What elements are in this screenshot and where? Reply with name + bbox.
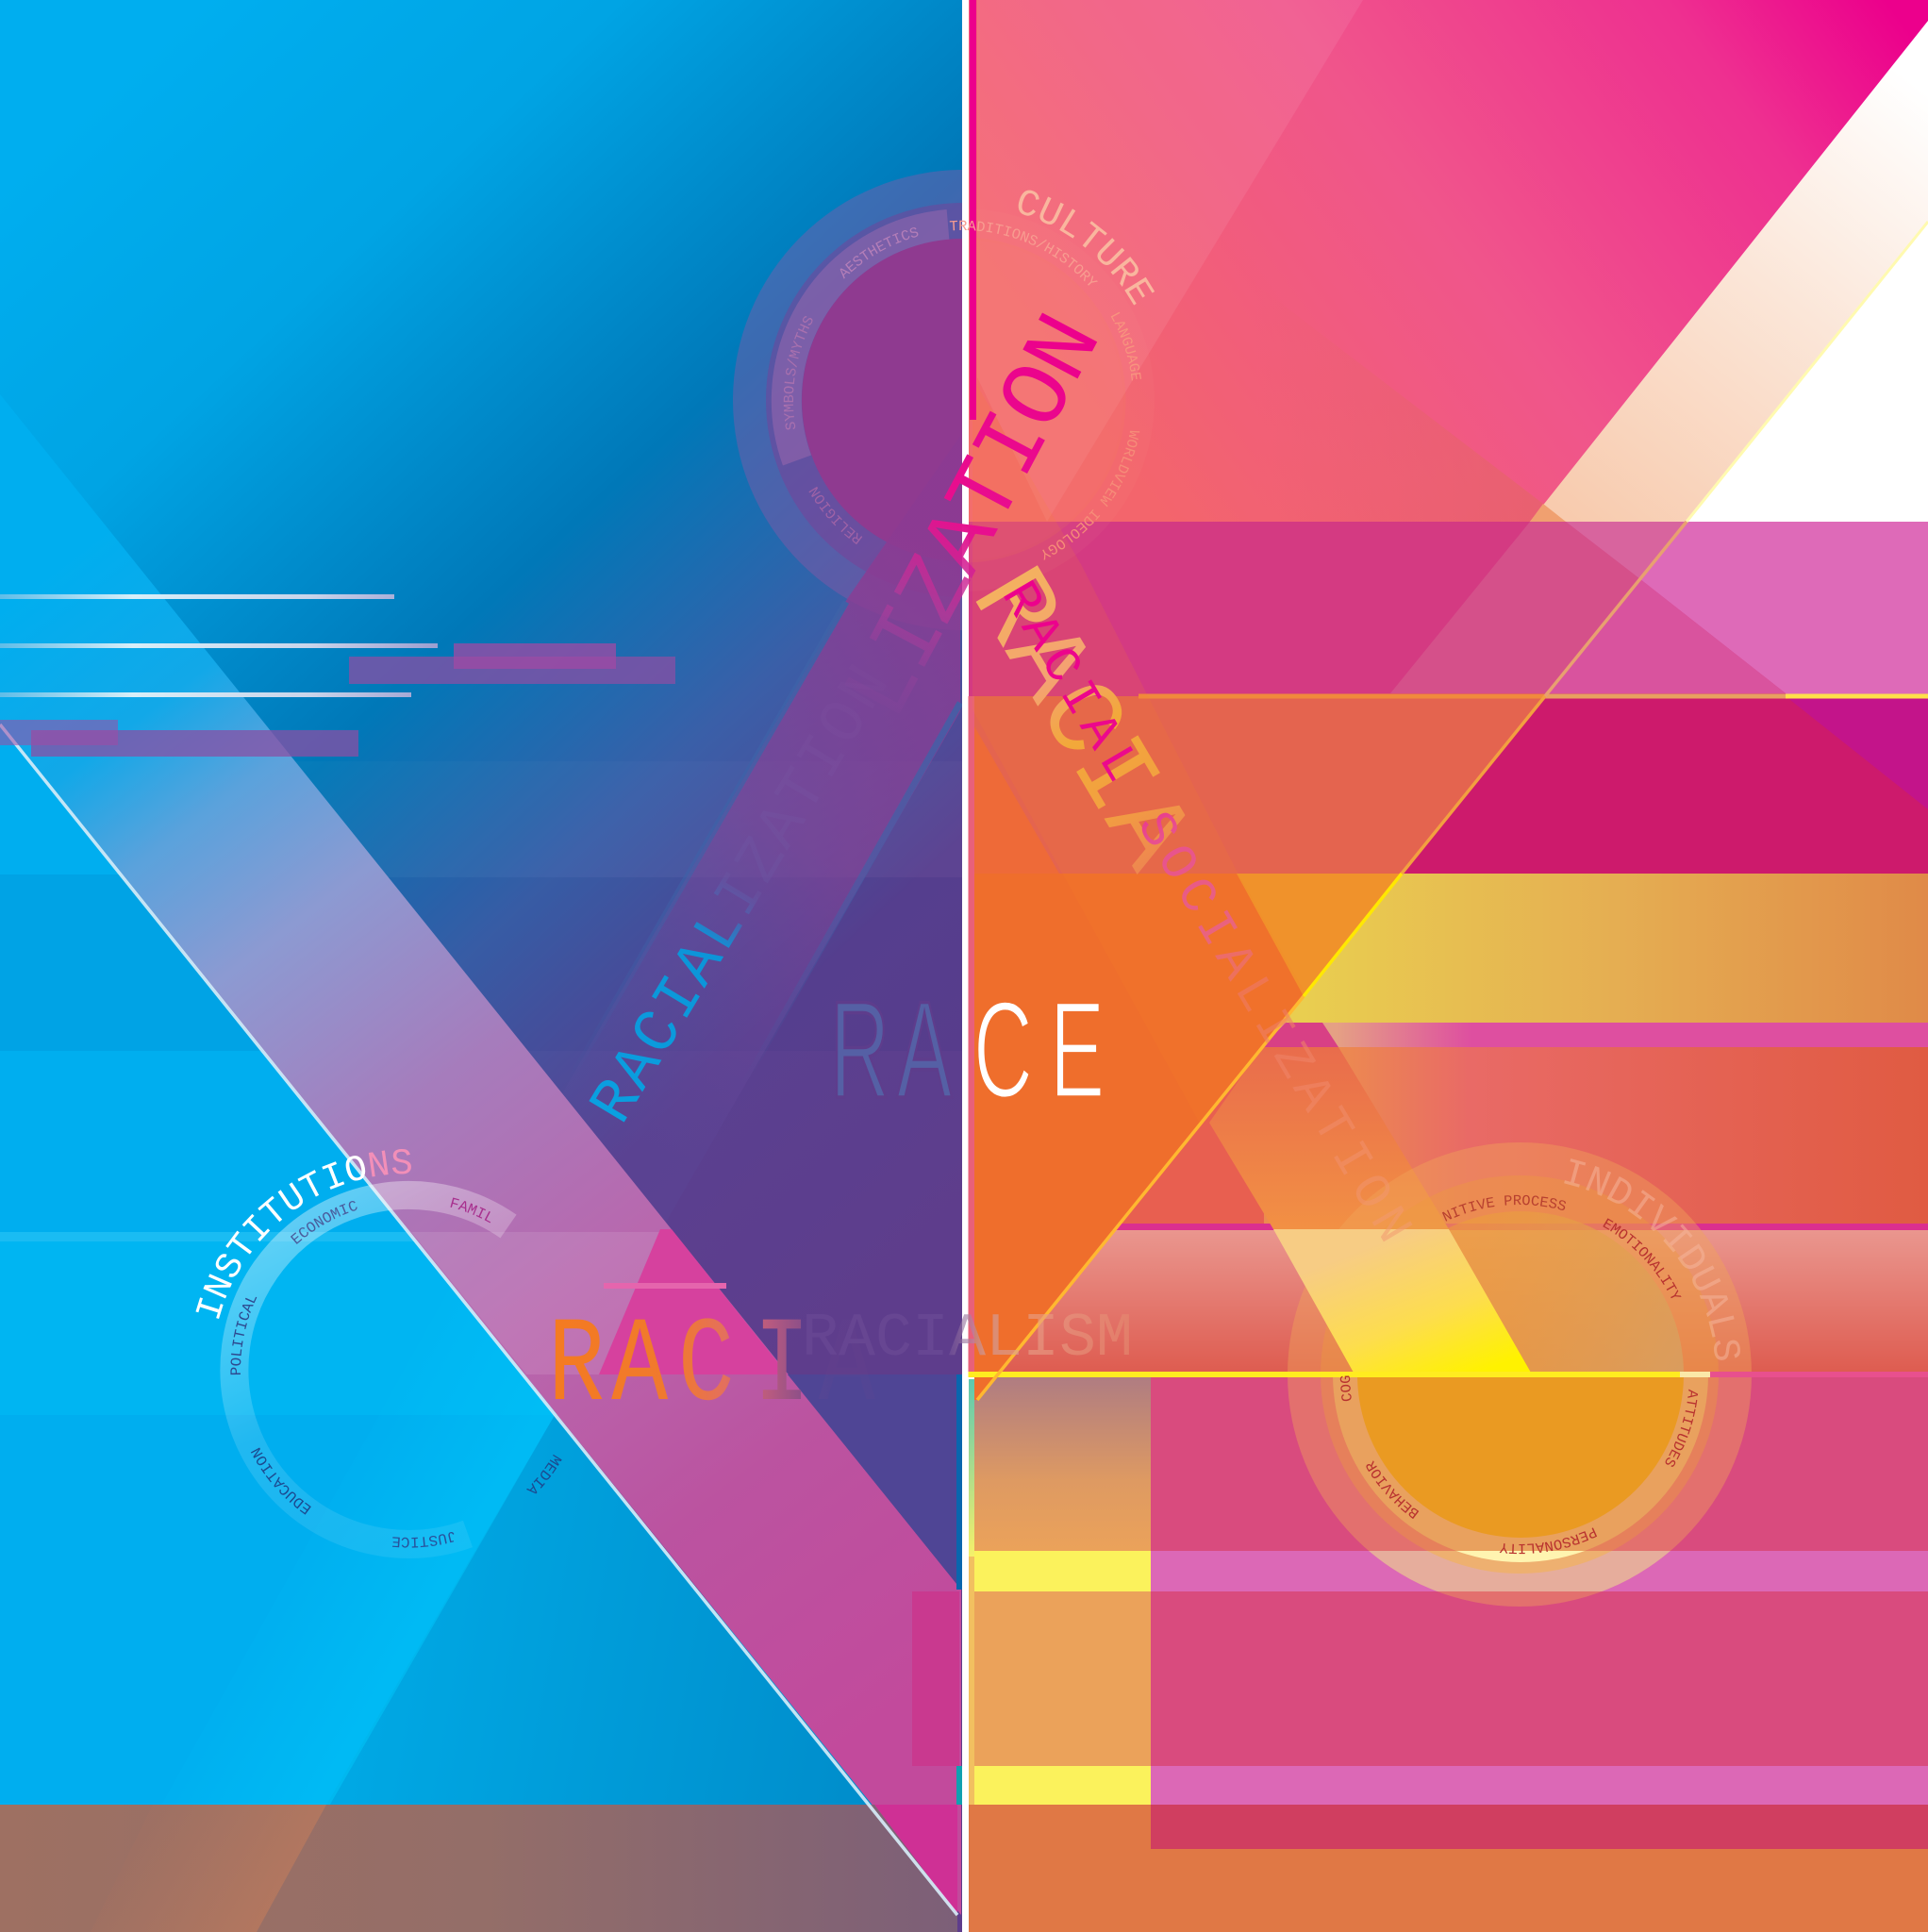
ring label: political: POLITICAL bbox=[230, 1296, 257, 1375]
heading: race: R bbox=[830, 973, 889, 1127]
heading: racialism faint: RACIALISM bbox=[802, 1304, 1133, 1374]
circle heading: culture: CULTURE bbox=[1019, 191, 1155, 306]
ring label: justice: JUSTICE bbox=[392, 1532, 455, 1548]
heading: raci orange: R bbox=[548, 1298, 605, 1436]
panel: bottom brown band bbox=[0, 1805, 957, 1932]
ring label: language: LANGUAGE bbox=[1111, 311, 1141, 381]
panel: individuals circle bbox=[1273, 1142, 1752, 1607]
ring label: cognitive process: NITIVE PROCESS bbox=[1442, 1194, 1566, 1221]
heading: raci orange: A bbox=[611, 1298, 668, 1436]
heading: raci orange bbox=[548, 1298, 875, 1436]
heading: racia descending orange: RACIA bbox=[943, 548, 1215, 891]
panel: culture circle left half bbox=[733, 170, 962, 630]
ring label: symbols: SYMBOLS/MYTHS bbox=[783, 316, 813, 430]
circle heading: individuals: INDIVIDUALS bbox=[1564, 1158, 1740, 1360]
heading: raci orange: I bbox=[754, 1298, 810, 1436]
ring label: attitudes: ATTITUDES bbox=[1666, 1389, 1698, 1467]
ring label: cognitive: COG bbox=[1339, 1375, 1352, 1402]
ring label: education: EDUCATION bbox=[251, 1447, 311, 1515]
rising strip bbox=[377, 436, 960, 1415]
ring label: traditions: TRADITIONS/HISTORY bbox=[949, 221, 1098, 285]
ring label: worldview: WORLDVIEW IDEOLOGY bbox=[1042, 430, 1139, 560]
ring label: emotionality: EMOTIONALITY bbox=[1603, 1219, 1681, 1298]
heading: race bbox=[830, 973, 1105, 1127]
ring label: economic: ECONOMIC bbox=[291, 1201, 357, 1244]
light wedge bbox=[977, 0, 1363, 522]
panel: culture labels bbox=[764, 182, 1178, 575]
ring label: behavior: BEHAVIOR bbox=[1366, 1460, 1419, 1519]
heading: racialization large rising: RACIALIZATION bbox=[698, 301, 1125, 979]
heading: race: A bbox=[897, 973, 953, 1127]
ring label: family: FAMIL bbox=[451, 1198, 490, 1223]
panel: purple centre shading bbox=[788, 1374, 962, 1805]
strip tail bbox=[1273, 1229, 1531, 1373]
panel: cyan triangle lower left bbox=[0, 724, 957, 1932]
cream diagonal band bbox=[1530, 21, 1928, 522]
horizontal rule at row edge bbox=[1139, 694, 1928, 698]
panel: culture circle right half bbox=[969, 522, 1072, 562]
horizontal lines and blocks bbox=[0, 594, 675, 757]
yellow diagonal line bbox=[977, 522, 1687, 1400]
panel: diagonal band bbox=[0, 394, 961, 1915]
panel: lower right blocks bbox=[969, 1376, 1928, 1932]
panel: right field base bbox=[968, 0, 1928, 1377]
ring label: religion: RELIGION bbox=[809, 487, 862, 544]
panel: descending strip bbox=[972, 377, 1449, 1229]
panel: institutions ring bbox=[196, 1149, 562, 1558]
heading: raci orange: C bbox=[678, 1298, 735, 1436]
panel: left blue field bbox=[0, 0, 962, 1932]
magenta triangle on band bbox=[599, 1229, 788, 1374]
heading: racialization small rising: RACIALIZATION bbox=[577, 652, 906, 1136]
magenta vertical bar bbox=[970, 0, 976, 420]
diagonal white line bbox=[0, 724, 957, 1915]
ring label: personality: PERSONALITY bbox=[1500, 1527, 1597, 1555]
circle heading: institutions: INSTITUTIONS bbox=[196, 1149, 411, 1319]
heading: race: C bbox=[973, 973, 1033, 1127]
heading: racial socialization descending: RACIAL SOCIALIZATION bbox=[988, 573, 1425, 1260]
diagonal shading bbox=[1255, 283, 1543, 522]
large orange triangle bbox=[974, 696, 1545, 1400]
white vertical divider bbox=[962, 0, 968, 1932]
yellow horizontal line bbox=[968, 1372, 1928, 1377]
heading: race: E bbox=[1050, 973, 1105, 1127]
heading: raci orange: A bbox=[819, 1298, 875, 1436]
ring label: media: MEDIA bbox=[526, 1455, 562, 1494]
ring label: aesthetics: AESTHETICS bbox=[839, 227, 919, 279]
panel: individuals labels bbox=[1336, 1152, 1781, 1581]
white corner triangle bbox=[1687, 222, 1928, 522]
